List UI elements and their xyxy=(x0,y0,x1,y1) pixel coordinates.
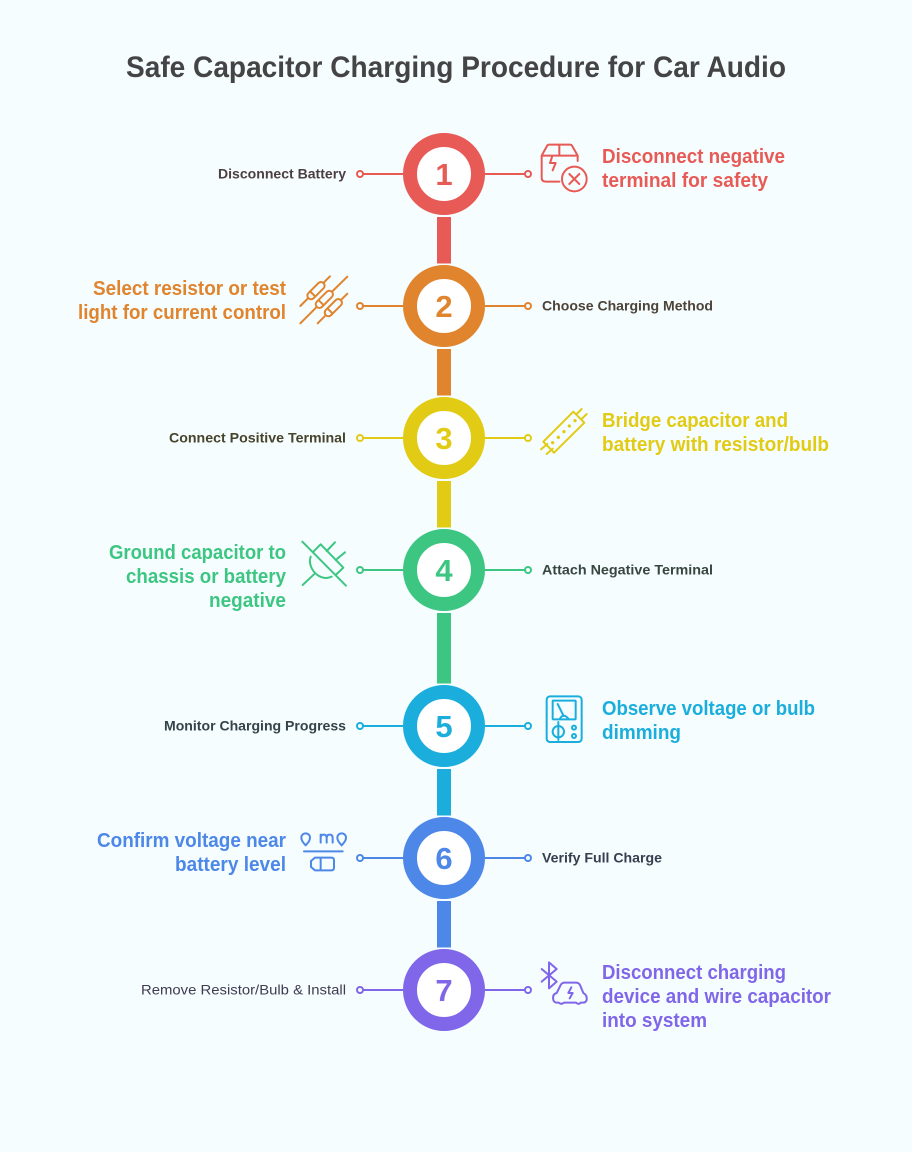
icon: multimeter xyxy=(547,696,582,742)
right pointer 4 xyxy=(485,567,531,573)
left pointer 7 xyxy=(357,987,403,993)
left pointer 2 xyxy=(357,303,403,309)
right pointer 1 xyxy=(485,171,531,177)
connector bar 2 xyxy=(437,349,451,396)
icon: bluetooth and electric car xyxy=(542,962,587,1004)
left pointer 3 xyxy=(357,435,403,441)
node 5: 5 xyxy=(435,709,453,744)
node 2: 2 xyxy=(435,289,453,324)
connector bar 3 xyxy=(437,481,451,528)
right pointer 6 xyxy=(485,855,531,861)
step 6: verify full charge xyxy=(97,824,662,948)
step 3: connect positive terminal xyxy=(169,404,829,528)
detail text 6 xyxy=(97,830,286,876)
detail text 2: Select resistor or test xyxy=(93,278,286,300)
node 2 xyxy=(410,272,478,340)
detail text 7: into system xyxy=(602,1010,707,1032)
right pointer 5 xyxy=(485,723,531,729)
detail text 1 xyxy=(602,146,785,192)
detail text 2: light for current control xyxy=(78,302,286,324)
right pointer 2 xyxy=(485,303,531,309)
step 5: monitor charging progress xyxy=(164,692,815,816)
detail text 1: terminal for safety xyxy=(602,170,769,192)
step 4: attach negative terminal xyxy=(109,536,713,684)
connector bar 6 xyxy=(437,901,451,948)
icon: capacitor strip xyxy=(541,409,587,454)
icon: box with lightning and cross xyxy=(542,145,587,191)
detail text 4: chassis or battery xyxy=(126,566,287,588)
connector bar 5 xyxy=(437,769,451,816)
short label 1: Disconnect Battery xyxy=(218,166,346,182)
short label 4: Attach Negative Terminal xyxy=(542,562,713,578)
detail text 4 xyxy=(109,542,287,612)
short label 7: Remove Resistor/Bulb & Install xyxy=(141,982,346,998)
detail text 7: device and wire capacitor xyxy=(602,986,831,1008)
node 5 xyxy=(410,692,478,760)
left pointer 1 xyxy=(357,171,403,177)
node 3 xyxy=(410,404,478,472)
icon: ohm reading over battery xyxy=(301,833,346,870)
node 1 xyxy=(410,140,478,208)
detail text 7: Disconnect charging xyxy=(602,962,786,984)
step 2: choose charging method xyxy=(78,272,713,396)
short label 2: Choose Charging Method xyxy=(542,298,713,314)
detail text 3: Bridge capacitor and xyxy=(602,410,788,432)
detail text 5 xyxy=(602,698,815,744)
right pointer 7 xyxy=(485,987,531,993)
left pointer 5 xyxy=(357,723,403,729)
short label 3: Connect Positive Terminal xyxy=(169,430,346,446)
node 6 xyxy=(410,824,478,892)
short label 6: Verify Full Charge xyxy=(542,850,662,866)
connector bar 4 xyxy=(437,613,451,684)
left pointer 4 xyxy=(357,567,403,573)
icon: crossed plug xyxy=(302,542,346,586)
detail text 4: Ground capacitor to xyxy=(109,542,286,564)
left pointer 6 xyxy=(357,855,403,861)
node 1: 1 xyxy=(435,157,453,192)
detail text 2 xyxy=(78,278,286,324)
node 7 xyxy=(410,956,478,1024)
detail text 5: dimming xyxy=(602,722,681,744)
connector bar 1 xyxy=(437,217,451,264)
step 7: remove resistor and install xyxy=(141,956,831,1032)
node 3: 3 xyxy=(435,421,453,456)
detail text 5: Observe voltage or bulb xyxy=(602,698,815,720)
detail text 7 xyxy=(602,962,831,1032)
icon: resistors xyxy=(300,276,347,323)
detail text 3: battery with resistor/bulb xyxy=(602,434,829,456)
node 6: 6 xyxy=(435,841,453,876)
right pointer 3 xyxy=(485,435,531,441)
node 7: 7 xyxy=(435,973,453,1008)
detail text 4: negative xyxy=(209,590,286,612)
detail text 3 xyxy=(602,410,829,456)
node 4 xyxy=(410,536,478,604)
title: Safe Capacitor Charging Procedure for Car Audio xyxy=(126,51,786,84)
step 1: disconnect battery xyxy=(218,140,785,264)
detail text 6: Confirm voltage near xyxy=(97,830,286,852)
detail text 1: Disconnect negative xyxy=(602,146,785,168)
short label 5: Monitor Charging Progress xyxy=(164,718,346,734)
node 4: 4 xyxy=(435,553,453,588)
detail text 6: battery level xyxy=(175,854,286,876)
